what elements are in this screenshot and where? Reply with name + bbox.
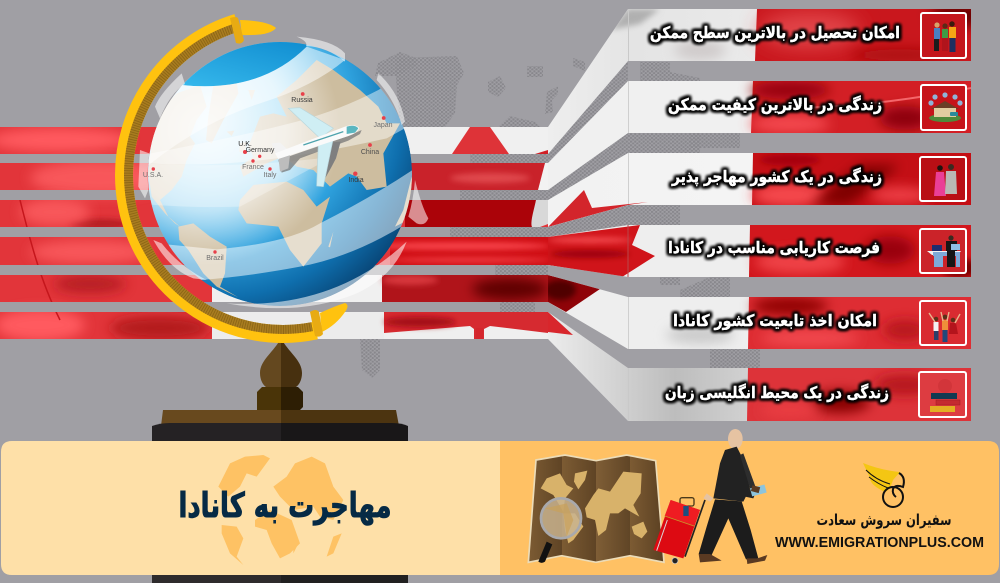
ice cap xyxy=(182,42,307,86)
continents xyxy=(148,60,413,297)
leaf strip 4 xyxy=(390,237,548,265)
globe meridian ring xyxy=(124,17,348,337)
icon: students xyxy=(921,13,966,58)
flag white field xyxy=(212,120,548,339)
logo: brand name: سفیران سروش سعادت xyxy=(816,511,952,529)
logo: website: WWW.EMIGRATIONPLUS.COM xyxy=(775,535,984,551)
city labels: Japan xyxy=(373,122,393,129)
magnifier xyxy=(538,498,581,563)
city labels: Germany xyxy=(246,147,275,154)
text: item 6: زندگی در یک محیط انگلیسی زبان xyxy=(665,383,889,402)
leaf strip 3 xyxy=(405,200,540,227)
ribbon 6 xyxy=(548,312,971,422)
illustration: folded map xyxy=(528,455,664,563)
banner: left title panel xyxy=(1,441,500,575)
text: item 1: امکان تحصیل در بالاترین سطح ممکن xyxy=(650,23,900,42)
logo: bird emblem xyxy=(863,463,904,507)
city labels xyxy=(143,92,393,262)
text: item 2: زندگی در بالاترین کیفیت ممکن xyxy=(668,95,882,114)
text: item 4: فرصت کاریابی مناسب در کانادا xyxy=(668,238,880,257)
globe halo xyxy=(138,37,428,308)
illustration: red suitcase xyxy=(653,498,705,564)
ribbon 1 xyxy=(548,3,990,155)
city labels: U.S.A. xyxy=(143,172,163,179)
icon: couple xyxy=(920,157,966,201)
leaf strip 2 xyxy=(410,163,545,190)
ribbon 3 xyxy=(548,153,971,228)
maple leaf top xyxy=(452,127,509,154)
city labels: Brazil xyxy=(206,255,224,262)
translucent bands xyxy=(133,47,420,280)
globe xyxy=(148,42,412,306)
ribbon 5 xyxy=(544,275,971,350)
ribbon 4 xyxy=(548,225,980,277)
title: مهاجرت به کانادا xyxy=(178,486,392,526)
city labels: France xyxy=(242,164,264,171)
icon: house xyxy=(921,85,966,130)
text: item 3: زندگی در یک کشور مهاجر پذیر xyxy=(671,167,882,187)
airplane xyxy=(272,108,362,187)
canadian flag strips left xyxy=(0,120,550,345)
city labels: Italy xyxy=(264,172,277,179)
illustration: walking man xyxy=(699,429,767,564)
icon: office desk xyxy=(920,229,966,273)
city labels: India xyxy=(348,177,364,184)
leaf strip 5 xyxy=(382,275,548,302)
globe stand xyxy=(152,338,408,583)
dotted world map xyxy=(360,52,760,378)
world map watermark xyxy=(218,455,343,565)
globe highlight xyxy=(148,43,330,258)
icon: celebrating people xyxy=(920,301,966,345)
ribbon 2 xyxy=(548,81,971,191)
icon: dictionaries xyxy=(919,372,966,417)
leaf strip 6 xyxy=(384,312,548,339)
banner: right panel xyxy=(500,441,999,575)
city labels: U.K. xyxy=(238,141,252,148)
city labels: Russia xyxy=(291,97,313,104)
text: item 5: امکان اخذ تابعیت کشور کانادا xyxy=(673,311,877,330)
city labels: China xyxy=(361,149,379,156)
